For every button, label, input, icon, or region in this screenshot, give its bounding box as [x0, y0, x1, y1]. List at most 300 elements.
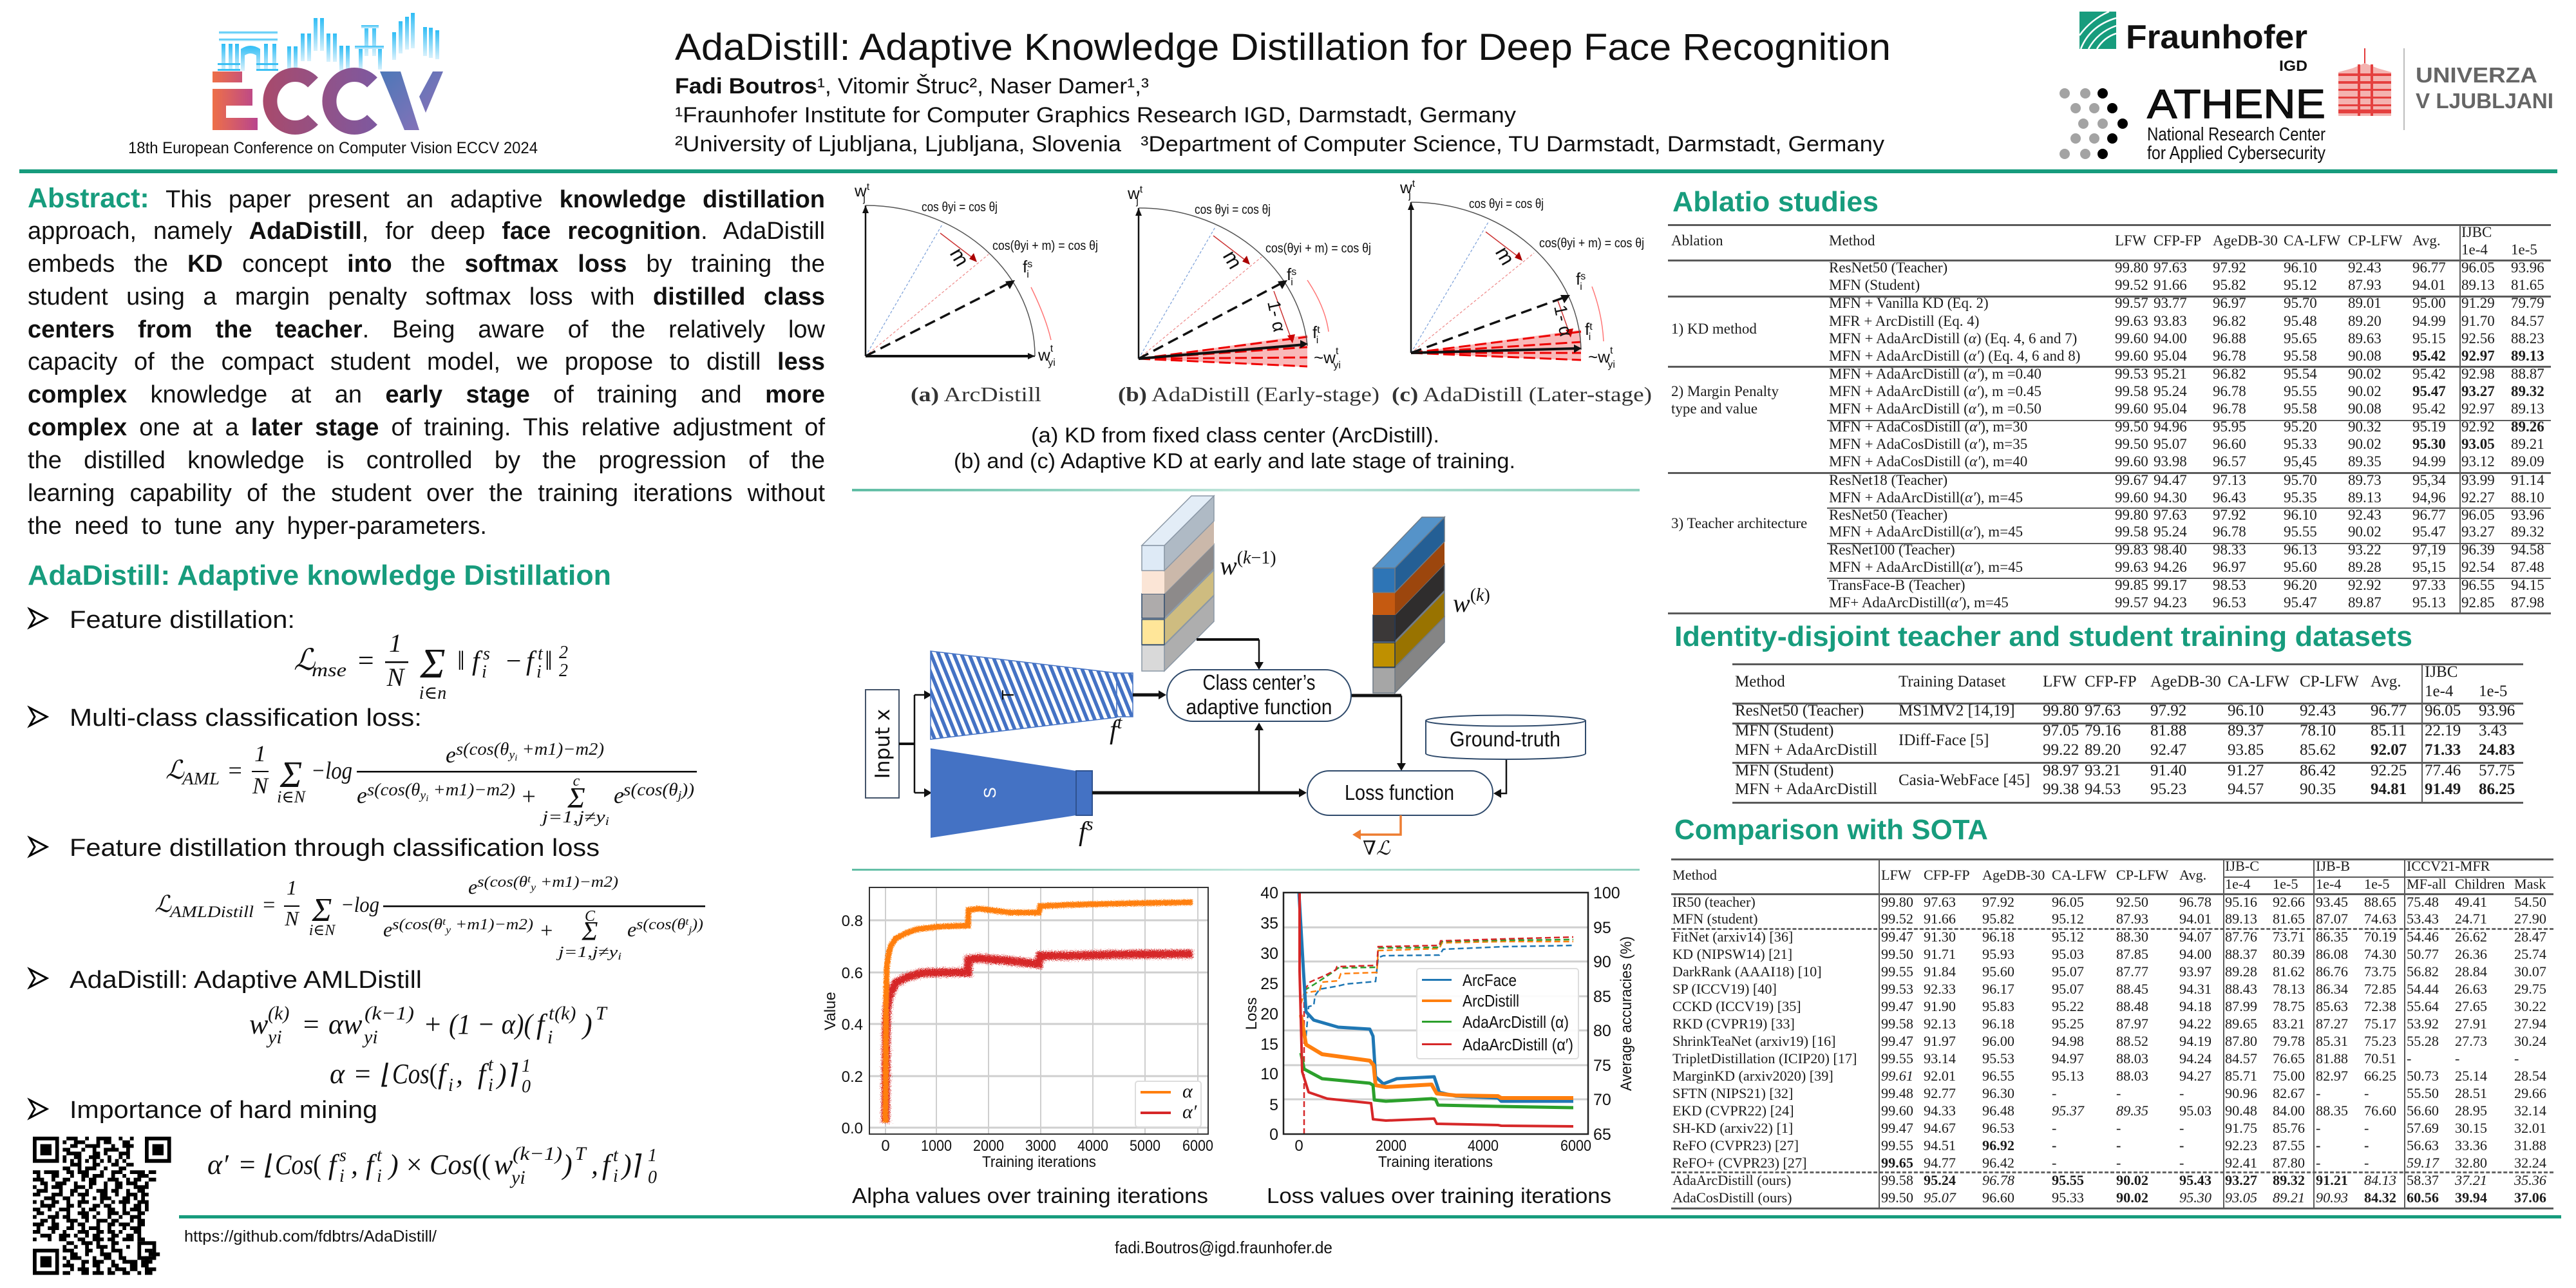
- table: comparison with SOTA: 55.64: [2407, 998, 2439, 1014]
- equation: alpha prime: 0: [648, 1168, 657, 1188]
- equation: AMLDistill loss: j: [687, 925, 692, 936]
- line chart: loss and accuracy: 40: [1260, 884, 1278, 902]
- table: ablation studies: MFN + AdaArcDistill(α′), m=45: [1829, 559, 2023, 575]
- table: ablation studies: 94.96: [2154, 419, 2187, 435]
- student network: S: [980, 787, 999, 799]
- table: comparison with SOTA: 28.84: [2455, 963, 2487, 980]
- table: comparison with SOTA: -: [2052, 1085, 2056, 1101]
- table: comparison with SOTA: 81.62: [2273, 963, 2305, 980]
- table: ablation studies: 92.56: [2461, 330, 2495, 346]
- table: ablation studies: 94.01: [2412, 277, 2446, 293]
- Fraunhofer IGD logo: IGD: [2279, 57, 2307, 74]
- table: comparison with SOTA: 91.84: [1924, 963, 1956, 980]
- table: comparison with SOTA: 87.80: [2225, 1033, 2257, 1049]
- equation: class center update: yi: [266, 1027, 282, 1048]
- equation: AMLDistill loss: Σ: [582, 917, 598, 947]
- table: ablation studies: 96.77: [2412, 260, 2446, 276]
- figure (b) AdaDistill early stage: s: [1291, 267, 1296, 278]
- table: ablation studies: 98.53: [2213, 577, 2246, 593]
- bullet: adaptive AMLDistill: AdaDistill: Adaptive AMLDistill: [70, 967, 422, 994]
- table: comparison with SOTA: 89.28: [2225, 963, 2257, 980]
- student network: [931, 748, 1092, 838]
- figure (a) ArcDistill geometry: i: [1027, 269, 1029, 280]
- table: ablation studies: 95,15: [2412, 559, 2446, 575]
- table: ablation studies: MFN + AdaArcDistill(α′), m=45: [1829, 524, 2023, 540]
- table: ablation studies: 99.63: [2115, 559, 2148, 575]
- table: comparison with SOTA: 95.33: [2052, 1189, 2084, 1206]
- table: comparison with SOTA: 99.61: [1881, 1068, 1913, 1084]
- table: comparison with SOTA: ShrinkTeaNet (arxiv19) [16]: [1672, 1033, 1836, 1049]
- figure (b) AdaDistill early stage: f: [1287, 265, 1291, 284]
- legend: loss chart: AdaArcDistill (α): [1463, 1012, 1569, 1032]
- table: ablation studies: 88.23: [2511, 330, 2544, 346]
- line chart: alpha values: [822, 887, 1213, 1171]
- table: ablation studies: Avg.: [2412, 232, 2441, 249]
- figure (c) AdaDistill later stage: ~w: [1588, 347, 1610, 366]
- table: comparison with SOTA: 32.24: [2514, 1155, 2546, 1171]
- table: ablation studies: 92.97: [2461, 348, 2495, 364]
- table: ablation studies: 95.47: [2412, 383, 2446, 399]
- table: comparison with SOTA: EKD (CVPR22) [24]: [1672, 1103, 1794, 1119]
- equation: AML loss: [166, 739, 697, 828]
- table: comparison with SOTA: 99.53: [1881, 981, 1913, 997]
- table: comparison with SOTA: 28.51: [2455, 1085, 2487, 1101]
- table: comparison with SOTA: IR50 (teacher): [1672, 894, 1756, 910]
- equation: AMLDistill loss: e: [468, 875, 477, 898]
- table: ablation studies: 93.77: [2154, 295, 2187, 311]
- table: comparison with SOTA: 74.63: [2364, 911, 2396, 927]
- table: ablation studies: 89.09: [2511, 453, 2544, 469]
- table: ablation studies: 92.27: [2461, 489, 2495, 506]
- equation: MSE loss: Σ: [419, 640, 446, 687]
- affiliation one: ¹Fraunhofer Institute for Computer Graphics Research IGD, Darmstadt, Germany: [675, 103, 1516, 128]
- table: ablation studies: 90.02: [2348, 383, 2382, 399]
- caption: alpha chart: Alpha values over training iterations: [852, 1184, 1208, 1208]
- equation: AML loss: y: [419, 789, 428, 804]
- gradient arrow: ∇ℒ: [1363, 838, 1391, 859]
- figure (b) AdaDistill early stage: i: [1316, 335, 1318, 346]
- equation: MSE loss: ‖: [457, 647, 465, 676]
- figure (c) AdaDistill later stage: s: [1580, 271, 1586, 282]
- table: comparison with SOTA: 56.63: [2407, 1137, 2439, 1153]
- table: comparison with SOTA: -: [2316, 1137, 2320, 1153]
- table: identity-disjoint datasets: CFP-FP: [2085, 673, 2137, 690]
- table: comparison with SOTA: 87.55: [2273, 1137, 2305, 1153]
- legend: alpha: [1135, 1081, 1201, 1127]
- table: comparison with SOTA: 75.48: [2407, 894, 2439, 910]
- table: identity-disjoint datasets: 1e-5: [2479, 683, 2507, 700]
- table: ablation studies: 96.13: [2284, 542, 2317, 558]
- table: identity-disjoint datasets: Training Dataset: [1899, 673, 2005, 690]
- equation: AML loss: s(cos(θ: [456, 739, 506, 759]
- table: comparison with SOTA: 30.24: [2514, 1033, 2546, 1049]
- equation: alpha prime: f: [328, 1149, 340, 1180]
- equation: alpha: i: [448, 1075, 453, 1095]
- equation: class center update: αw: [328, 1009, 363, 1040]
- table: comparison with SOTA: 87.99: [2225, 998, 2257, 1014]
- equation: class center update: (k): [554, 1003, 576, 1024]
- table: ablation studies: 89.13: [2511, 348, 2544, 364]
- heading: identity-disjoint: Identity-disjoint teacher and student training datasets: [1674, 621, 2412, 652]
- table: identity-disjoint datasets: Method: [1735, 673, 1785, 690]
- table: comparison with SOTA: 92.33: [1924, 981, 1956, 997]
- equation: AMLDistill loss: j=1,j≠y: [558, 944, 604, 961]
- table: comparison with SOTA: 88.65: [2364, 894, 2396, 910]
- table: comparison with SOTA: 96.60: [1982, 1189, 2014, 1206]
- table: comparison with SOTA: TripletDistillation (ICIP20) [17]: [1672, 1050, 1857, 1066]
- table: comparison with SOTA: 78.13: [2273, 981, 2305, 997]
- table: identity-disjoint datasets: 99.22: [2043, 741, 2079, 759]
- table: ablation studies: 99.80: [2115, 260, 2148, 276]
- table: ablation studies: 90.02: [2348, 436, 2382, 452]
- table: comparison with SOTA: 99.58: [1881, 1016, 1913, 1032]
- table: comparison with SOTA: 90.48: [2225, 1103, 2257, 1119]
- table: ablation studies: MFR + ArcDistill (Eq. 4): [1829, 313, 1979, 329]
- equation: AML loss: −log: [311, 757, 352, 784]
- abstract text block: [28, 183, 826, 540]
- figure (c) AdaDistill later stage: t: [1589, 321, 1593, 332]
- table: comparison with SOTA: 85.63: [2316, 998, 2348, 1014]
- table: comparison with SOTA: 96.00: [1982, 1033, 2014, 1049]
- table: comparison with SOTA: 88.30: [2116, 929, 2148, 945]
- table: ablation studies: 2) Margin Penalty: [1671, 383, 1779, 399]
- table: ablation studies: CA-LFW: [2284, 232, 2340, 249]
- table: comparison with SOTA: 94.22: [2179, 1016, 2211, 1032]
- table: identity-disjoint datasets: 86.42: [2300, 762, 2336, 779]
- equation: AMLDistill loss: +m1)−m2): [451, 916, 533, 933]
- equation: alpha prime: T: [575, 1143, 587, 1164]
- table: comparison with SOTA: 89.65: [2225, 1016, 2257, 1032]
- table: identity-disjoint datasets: 99.38: [2043, 781, 2079, 798]
- table: comparison with SOTA: 95.25: [2052, 1016, 2084, 1032]
- figure (b) AdaDistill early stage: i: [1291, 277, 1293, 288]
- table: ablation studies: 96.53: [2213, 594, 2246, 611]
- table: identity-disjoint datasets: 79.16: [2085, 722, 2121, 739]
- table: ablation studies: 84.57: [2511, 313, 2544, 329]
- table: identity-disjoint datasets: CP-LFW: [2300, 673, 2359, 690]
- table: ablation studies: 94.23: [2154, 594, 2187, 611]
- table: ablation studies: 99.63: [2115, 313, 2148, 329]
- equation: MSE loss: t: [538, 644, 544, 664]
- stack: previous class centers: [1142, 496, 1214, 671]
- table: ablation studies: 95.24: [2154, 524, 2187, 540]
- table: identity-disjoint datasets: 89.20: [2085, 741, 2121, 759]
- equation: MSE loss: mse: [312, 659, 346, 681]
- table: comparison with SOTA: 27.94: [2514, 1016, 2546, 1032]
- table: ablation studies: 99.60: [2115, 401, 2148, 417]
- table: comparison with SOTA: -: [2116, 1085, 2121, 1101]
- equation: MSE loss: N: [386, 663, 406, 692]
- table: comparison with SOTA: AdaArcDistill (ours): [1672, 1172, 1791, 1188]
- table: comparison with SOTA: 27.73: [2455, 1033, 2487, 1049]
- table: ablation studies: 96.60: [2213, 436, 2246, 452]
- table: ablation studies: 92.43: [2348, 260, 2382, 276]
- equation: MSE loss: i∈n: [419, 683, 446, 703]
- series: alpha: [886, 902, 1193, 1122]
- equation: AML loss: j=1,j≠y: [542, 808, 592, 826]
- table: comparison with SOTA: 74.30: [2364, 946, 2396, 962]
- table: comparison with SOTA: 95.83: [1982, 998, 2014, 1014]
- table: ablation studies: 95.19: [2412, 419, 2446, 435]
- equation: alpha prime: ): [620, 1149, 632, 1180]
- abstract text block: capacity of the compact student model, we propose to distill less: [28, 348, 825, 375]
- table: ablation studies: 94.99: [2412, 453, 2446, 469]
- table: comparison with SOTA: 96.53: [1982, 1120, 2014, 1136]
- University of Ljubljana logo: UNIVERZA: [2416, 63, 2537, 87]
- table: ablation studies: 96.97: [2213, 295, 2246, 311]
- class center adaptive function box: adaptive function: [1186, 695, 1332, 719]
- table: comparison with SOTA: 94.18: [2179, 998, 2211, 1014]
- table: ablation studies: 95.65: [2284, 330, 2317, 346]
- abstract text block: centers from the teacher. Being aware of the relatively low: [28, 316, 825, 343]
- equation: class center update: (k−1): [365, 1003, 414, 1024]
- table: comparison with SOTA: 95.03: [2179, 1103, 2211, 1119]
- table: identity-disjoint datasets: 91.27: [2228, 762, 2264, 779]
- table: ablation studies: MFN + AdaArcDistill (α′), m =0.50: [1829, 401, 2041, 417]
- table: ablation studies: 1e-5: [2511, 242, 2537, 258]
- equation: AML loss: +m1)−m2): [428, 780, 515, 799]
- equation: alpha prime: Cos((: [430, 1149, 491, 1180]
- table: ablation studies: 94.47: [2154, 472, 2187, 488]
- table: ablation studies: 96.82: [2213, 313, 2246, 329]
- table: comparison with SOTA: 28.54: [2514, 1068, 2546, 1084]
- table: ablation studies: 96.10: [2284, 507, 2317, 523]
- table: comparison with SOTA: 94.98: [2052, 1033, 2084, 1049]
- table: ablation studies: 96.20: [2284, 577, 2317, 593]
- table: comparison with SOTA: 95.13: [2052, 1068, 2084, 1084]
- figure (c) AdaDistill later stage: m: [1491, 242, 1519, 269]
- table: comparison with SOTA: 29.66: [2514, 1085, 2546, 1101]
- table: comparison with SOTA: 75.00: [2273, 1068, 2305, 1084]
- table: ablation studies: 81.65: [2511, 277, 2544, 293]
- table: comparison with SOTA: 94.19: [2179, 1033, 2211, 1049]
- table: comparison with SOTA: -: [2316, 1085, 2320, 1101]
- table: ablation studies: 90.02: [2348, 366, 2382, 382]
- architecture diagram: [866, 496, 1586, 859]
- equation: AMLDistill loss: 1: [287, 876, 297, 899]
- table: comparison with SOTA: 78.75: [2273, 998, 2305, 1014]
- equation: AML loss: e: [614, 782, 624, 808]
- figure (c) AdaDistill later stage: 1- α: [1550, 303, 1577, 338]
- table: ablation studies: ResNet50 (Teacher): [1829, 260, 1947, 276]
- figure description line two: (b) and (c) Adaptive KD at early and late stage of training.: [954, 449, 1515, 473]
- table: comparison with SOTA: 96.05: [2052, 894, 2084, 910]
- table: comparison with SOTA: 31.88: [2514, 1137, 2546, 1153]
- table: comparison with SOTA: 91.90: [1924, 998, 1956, 1014]
- table: comparison with SOTA: CA-LFW: [2052, 867, 2107, 883]
- conference caption: 18th European Conference on Computer Vision ECCV 2024: [128, 139, 538, 157]
- input box: Input x: [871, 709, 895, 779]
- figure (b) AdaDistill early stage: ~w: [1314, 348, 1336, 367]
- bullet: feature distillation: Feature distillation:: [70, 607, 295, 634]
- table: comparison with SOTA: -: [2364, 1155, 2369, 1171]
- equation: AML loss: j: [676, 789, 681, 802]
- table: comparison with SOTA: 90.02: [2116, 1172, 2148, 1188]
- line chart: loss and accuracy: 15: [1260, 1036, 1278, 1054]
- equation: class center update: (1 − α)(: [449, 1009, 534, 1040]
- table: ablation studies: 93.83: [2154, 313, 2187, 329]
- table: comparison with SOTA: 86.76: [2316, 963, 2348, 980]
- table: comparison with SOTA: -: [2052, 1155, 2056, 1171]
- table: comparison with SOTA: 73.71: [2273, 929, 2305, 945]
- table: comparison with SOTA: 88.35: [2316, 1103, 2348, 1119]
- table: ablation studies: 89.21: [2511, 436, 2544, 452]
- equation: AMLDistill loss: +: [539, 919, 554, 943]
- table: ablation studies: AgeDB-30: [2213, 232, 2278, 249]
- equation: AML loss: ℒ: [166, 755, 185, 785]
- table: comparison with SOTA: 70.51: [2364, 1050, 2396, 1066]
- abstract text block: student using a margin penalty softmax loss with distilled class: [28, 283, 825, 310]
- heading: comparison with SOTA: Comparison with SOTA: [1674, 814, 1988, 846]
- table: ablation studies: 91.70: [2461, 313, 2495, 329]
- ground-truth database: [1426, 715, 1586, 759]
- heading: ablation studies: Ablatio studies: [1672, 186, 1879, 218]
- table: comparison with SOTA: 99.80: [1881, 894, 1913, 910]
- figure (c) AdaDistill later stage: cos θyi = cos θj: [1469, 197, 1544, 211]
- table: identity-disjoint datasets: 93.21: [2085, 762, 2121, 779]
- equation: alpha prime: i: [377, 1166, 382, 1186]
- ground-truth database: Ground-truth: [1450, 727, 1560, 751]
- equation: alpha: =: [353, 1058, 372, 1090]
- input box: [866, 690, 899, 798]
- table: comparison with SOTA: 50.77: [2407, 946, 2439, 962]
- table: identity-disjoint datasets: Casia-WebFace [45]: [1899, 772, 2030, 789]
- equation: alpha: i: [488, 1075, 493, 1095]
- table: comparison with SOTA: 99.48: [1881, 1085, 1913, 1101]
- equation: AML loss: Σ: [567, 781, 585, 814]
- table: identity-disjoint datasets: MS1MV2 [14,19]: [1899, 702, 2015, 719]
- table: comparison with SOTA: 85.71: [2225, 1068, 2257, 1084]
- table: comparison with SOTA: 84.00: [2273, 1103, 2305, 1119]
- table: comparison with SOTA: 99.47: [1881, 1120, 1913, 1136]
- table: identity-disjoint datasets: 77.46: [2425, 762, 2461, 779]
- table: comparison with SOTA: -: [2052, 1137, 2056, 1153]
- table: comparison with SOTA: 95.30: [2179, 1189, 2211, 1206]
- table: comparison with SOTA: 35.36: [2514, 1172, 2546, 1188]
- table: ablation studies: type and value: [1671, 401, 1757, 417]
- table: identity-disjoint datasets: 92.47: [2150, 741, 2186, 759]
- table: comparison with SOTA: ICCV21-MFR: [2407, 858, 2490, 874]
- equation: AML loss: =: [227, 757, 243, 784]
- table: identity-disjoint datasets: IDiff-Face [5]: [1899, 732, 1989, 749]
- table: ablation studies: MFN + AdaCosDistill (α′), m=40: [1829, 453, 2027, 469]
- equation: MSE loss: i: [536, 662, 542, 682]
- line chart: alpha values: 0.2: [842, 1068, 863, 1086]
- equation: alpha prime: ,: [591, 1149, 598, 1180]
- equation: AML loss: 1: [254, 741, 266, 766]
- legend: loss chart: ArcDistill: [1463, 991, 1519, 1010]
- table: comparison with SOTA: 58.37: [2407, 1172, 2439, 1188]
- table: identity-disjoint datasets: 92.07: [2371, 741, 2407, 759]
- table: ablation studies: 98.40: [2154, 542, 2187, 558]
- table: identity-disjoint datasets: ResNet50 (Teacher): [1735, 702, 1864, 719]
- series: loss solid lines: [1299, 893, 1573, 1126]
- table: ablation studies: 95.42: [2412, 401, 2446, 417]
- legend: alpha: α: [1182, 1081, 1193, 1102]
- table: comparison with SOTA: 72.85: [2364, 981, 2396, 997]
- equation: alpha prime: f: [366, 1149, 377, 1180]
- abstract text block: embeds the KD concept into the softmax loss by training the: [28, 251, 825, 278]
- table: comparison with SOTA: 99.50: [1881, 946, 1913, 962]
- table: ablation studies: 99.85: [2115, 577, 2148, 593]
- table: comparison with SOTA: 94.27: [2179, 1068, 2211, 1084]
- ECCV logo: [213, 13, 443, 130]
- equation: AML loss: s(cos(θ: [623, 780, 674, 799]
- figure (c) AdaDistill later stage: i: [1589, 332, 1591, 343]
- table: comparison with SOTA: 30.07: [2514, 963, 2546, 980]
- table: comparison with SOTA: 96.78: [1982, 1172, 2014, 1188]
- table: comparison with SOTA: 95.43: [2179, 1172, 2211, 1188]
- equation: AMLDistill loss: y: [444, 925, 451, 936]
- table: ablation studies: 99.57: [2115, 295, 2148, 311]
- table: ablation studies: 89.87: [2348, 594, 2382, 611]
- table: identity-disjoint datasets: 94.57: [2228, 781, 2264, 798]
- table: identity-disjoint datasets: 93.96: [2479, 702, 2515, 719]
- table: comparison with SOTA: CFP-FP: [1924, 867, 1970, 883]
- table: comparison with SOTA: 94.01: [2179, 911, 2211, 927]
- table: ablation studies: 99.58: [2115, 524, 2148, 540]
- bullet: distillation through classification: Feature distillation through classification loss: [70, 835, 600, 862]
- equation: MSE loss: −: [504, 647, 522, 676]
- table: comparison with SOTA: 73.75: [2364, 963, 2396, 980]
- line chart: alpha values: 1000: [921, 1137, 952, 1155]
- table: comparison with SOTA: 88.52: [2116, 1033, 2148, 1049]
- table: identity-disjoint datasets: 89.37: [2228, 722, 2264, 739]
- table: ablation studies: 79.79: [2511, 295, 2544, 311]
- table: identity-disjoint datasets: AgeDB-30: [2150, 673, 2221, 690]
- table: ablation studies: 95.70: [2284, 295, 2317, 311]
- table: comparison with SOTA: 94.31: [2179, 981, 2211, 997]
- table: comparison with SOTA: SP (ICCV19) [40]: [1672, 981, 1777, 997]
- table: identity-disjoint datasets: 99.80: [2043, 702, 2079, 719]
- heading: AdaDistill section: AdaDistill: Adaptive knowledge Distillation: [28, 560, 611, 591]
- table: ablation studies: 93.27: [2461, 524, 2495, 540]
- table: comparison with SOTA: 95.16: [2225, 894, 2257, 910]
- table: identity-disjoint datasets: 85.62: [2300, 741, 2336, 759]
- table: identity-disjoint datasets: 22.19: [2425, 722, 2461, 739]
- legend: loss chart: AdaArcDistill (α′): [1463, 1035, 1573, 1054]
- table: ablation studies: 95.47: [2284, 594, 2317, 611]
- table: comparison with SOTA: -: [2455, 1050, 2459, 1066]
- table: ablation studies: 89.20: [2348, 313, 2382, 329]
- equation: alpha prime: i: [613, 1166, 618, 1186]
- table: ablation studies: 99.58: [2115, 383, 2148, 399]
- equation: AML loss: s(cos(θ: [367, 780, 417, 799]
- table: comparison with SOTA: 91.66: [1924, 911, 1956, 927]
- table: comparison with SOTA: 37.21: [2455, 1172, 2487, 1188]
- table: ablation studies: 97.92: [2213, 260, 2246, 276]
- table: ablation studies: 93.96: [2511, 260, 2544, 276]
- class center adaptive function box: Class center’s: [1203, 670, 1315, 694]
- table: ablation studies: 97.92: [2213, 507, 2246, 523]
- line chart: loss and accuracy: 2000: [1376, 1137, 1406, 1155]
- table: ablation studies: 99.60: [2115, 453, 2148, 469]
- table: comparison with SOTA: 87.76: [2225, 929, 2257, 945]
- table: ablation studies: 95.20: [2284, 419, 2317, 435]
- table: comparison with SOTA: 95.03: [2052, 946, 2084, 962]
- table: identity-disjoint datasets: Avg.: [2371, 673, 2401, 690]
- equation: alpha: f: [438, 1058, 450, 1090]
- label: student feature: s: [1086, 815, 1094, 835]
- table: identity-disjoint datasets: 98.97: [2043, 762, 2079, 779]
- table: comparison with SOTA: 57.69: [2407, 1120, 2439, 1136]
- table: ablation studies: MF+ AdaArcDistill(α′), m=45: [1829, 594, 2009, 611]
- table: identity-disjoint datasets: 3.43: [2479, 722, 2507, 739]
- table: ablation studies: 99.17: [2154, 577, 2187, 593]
- table: comparison with SOTA: 99.58: [1881, 1172, 1913, 1188]
- table: comparison with SOTA: 99.55: [1881, 1137, 1913, 1153]
- table: identity-disjoint datasets: 97.92: [2150, 702, 2186, 719]
